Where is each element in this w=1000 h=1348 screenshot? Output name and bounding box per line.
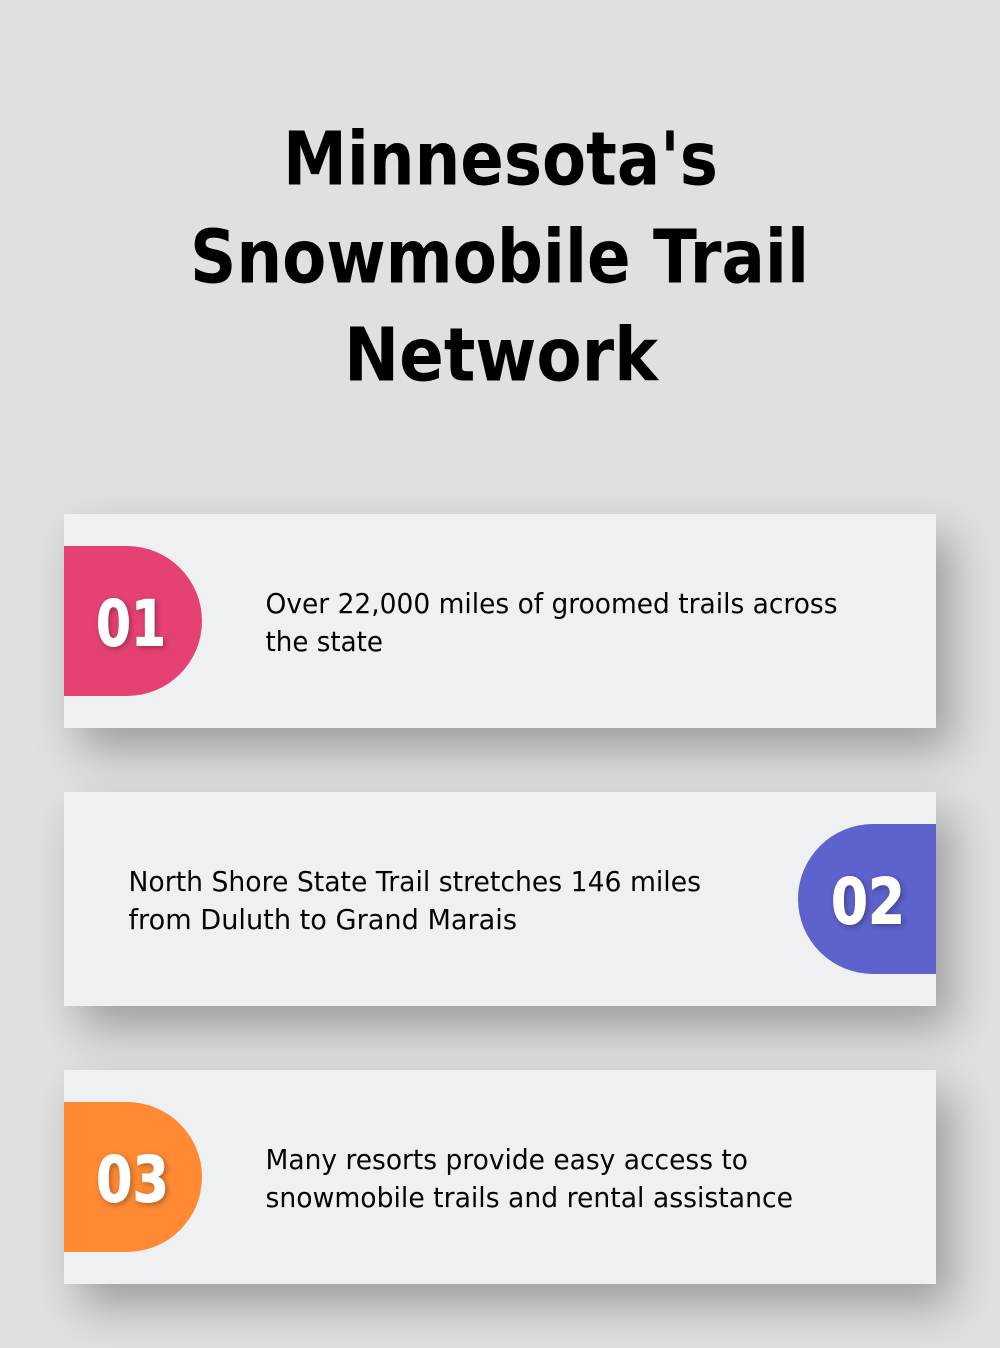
text: item 01 <box>266 587 838 658</box>
text: item 02: from Duluth to Grand Marais <box>128 903 517 936</box>
text: item 02: North Shore State Trail stretches 146 miles <box>128 865 701 898</box>
title: Network <box>344 312 660 398</box>
text: item 03: snowmobile trails and rental assistance <box>266 1181 793 1214</box>
text: item 01: the state <box>266 625 383 658</box>
badge: 01 <box>64 546 202 696</box>
badge: 03 <box>64 1102 202 1252</box>
badge: 02: 02 <box>831 866 905 938</box>
title: Minnesota's <box>283 116 718 202</box>
badge: 01: 01 <box>96 588 166 660</box>
text: item 02 <box>128 865 701 936</box>
title <box>190 116 809 398</box>
badge: 02 <box>798 824 936 974</box>
title: Snowmobile Trail <box>190 214 809 300</box>
panel: item 03 <box>64 1070 936 1284</box>
panel: item 02 <box>64 792 936 1006</box>
badge: 03: 03 <box>96 1144 169 1216</box>
text: item 01: Over 22,000 miles of groomed trails across <box>266 587 838 620</box>
text: item 03: Many resorts provide easy access to <box>266 1143 748 1176</box>
panel: item 01 <box>64 514 936 728</box>
text: item 03 <box>266 1143 793 1214</box>
